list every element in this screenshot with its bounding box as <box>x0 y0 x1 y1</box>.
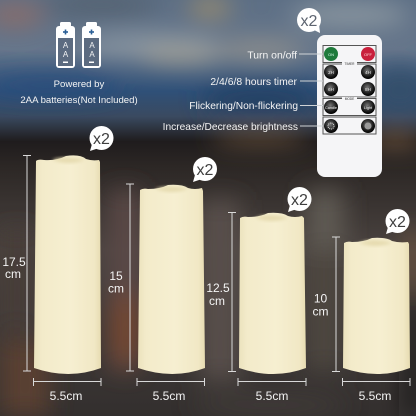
badge: x2 candle 3: x2 <box>291 192 308 209</box>
icon: battery right: A <box>89 50 95 59</box>
remote control <box>317 35 382 177</box>
remote callout labels: Increase/Decrease brightness <box>163 122 298 133</box>
candle 1 <box>34 155 101 374</box>
dimension: 12.5 cm height: 12.5 <box>206 281 230 295</box>
badge: x2 candle 2: x2 <box>197 162 214 179</box>
dimension: candle 2 width <box>137 378 204 403</box>
power buttons: ON <box>328 52 334 57</box>
mode buttons: MODE <box>345 97 354 101</box>
timer buttons: 2H <box>328 70 334 75</box>
remote callout labels: Flickering/Non-flickering <box>189 101 298 112</box>
badge: x2 candle 2 <box>193 157 217 182</box>
mode buttons: Light <box>364 106 373 110</box>
candle 4 <box>343 238 410 374</box>
dimension: 15 cm height <box>108 184 134 371</box>
remote callout labels: Turn on/off <box>247 50 297 62</box>
timer buttons: 6H <box>328 87 334 92</box>
dimension: 12.5 cm height: cm <box>209 294 225 308</box>
mode buttons <box>324 97 375 114</box>
remote callout labels <box>163 50 323 133</box>
candle 2 <box>138 185 205 374</box>
dimension: 17.5 cm height <box>2 156 31 371</box>
dimension: candle 4 width <box>342 378 410 403</box>
battery caption: 2AA batteries(Not Included) <box>20 95 138 106</box>
dimension: 10 cm height: cm <box>312 305 328 319</box>
battery caption <box>20 79 138 106</box>
icon: battery right <box>82 22 101 68</box>
dimension: 10 cm height: 10 <box>314 292 327 306</box>
icon: two AA batteries <box>56 22 101 68</box>
candle 3 <box>239 213 306 374</box>
badge: x2 remote <box>297 8 321 33</box>
dimension: 15 cm height: 15 <box>109 269 123 283</box>
remote callout labels: 2/4/6/8 hours timer <box>210 77 298 88</box>
badge: x2 remote: x2 <box>301 13 318 30</box>
badge: x2 candle 4: x2 <box>389 214 406 231</box>
timer buttons: 4H <box>365 70 371 75</box>
badge: x2 candle 3 <box>288 187 312 212</box>
dimension: 15 cm height: cm <box>108 282 124 296</box>
power buttons: OFF <box>364 52 373 57</box>
icon: battery left <box>56 22 75 68</box>
brightness buttons <box>324 119 375 133</box>
dimension: candle 3 width <box>238 378 306 403</box>
dimension: candle 3 width: 5.5cm <box>256 389 288 403</box>
dimension: candle 1 width: 5.5cm <box>50 389 82 403</box>
dimension: candle 2 width: 5.5cm <box>153 389 185 403</box>
timer buttons: TIMER <box>345 62 355 66</box>
badge: x2 candle 4 <box>386 209 410 234</box>
badge: x2 candle 1: x2 <box>93 131 110 148</box>
mode buttons: Candle <box>325 106 337 110</box>
dimension: candle 1 width <box>34 378 101 403</box>
power buttons <box>324 47 375 61</box>
timer buttons <box>324 62 375 96</box>
dimension: 12.5 cm height <box>206 212 236 372</box>
dimension: 17.5 cm height: 17.5 <box>2 255 26 269</box>
dimension: 17.5 cm height: cm <box>5 267 21 281</box>
icon: battery left: A <box>63 50 69 59</box>
badge: x2 candle 1 <box>90 126 114 151</box>
timer buttons: 8H <box>365 87 371 92</box>
battery caption: Powered by <box>54 79 105 90</box>
dimension: candle 4 width: 5.5cm <box>359 389 391 403</box>
icon: battery left: A <box>63 41 69 50</box>
icon: battery right: A <box>89 41 95 50</box>
dimension: 10 cm height <box>312 237 340 372</box>
